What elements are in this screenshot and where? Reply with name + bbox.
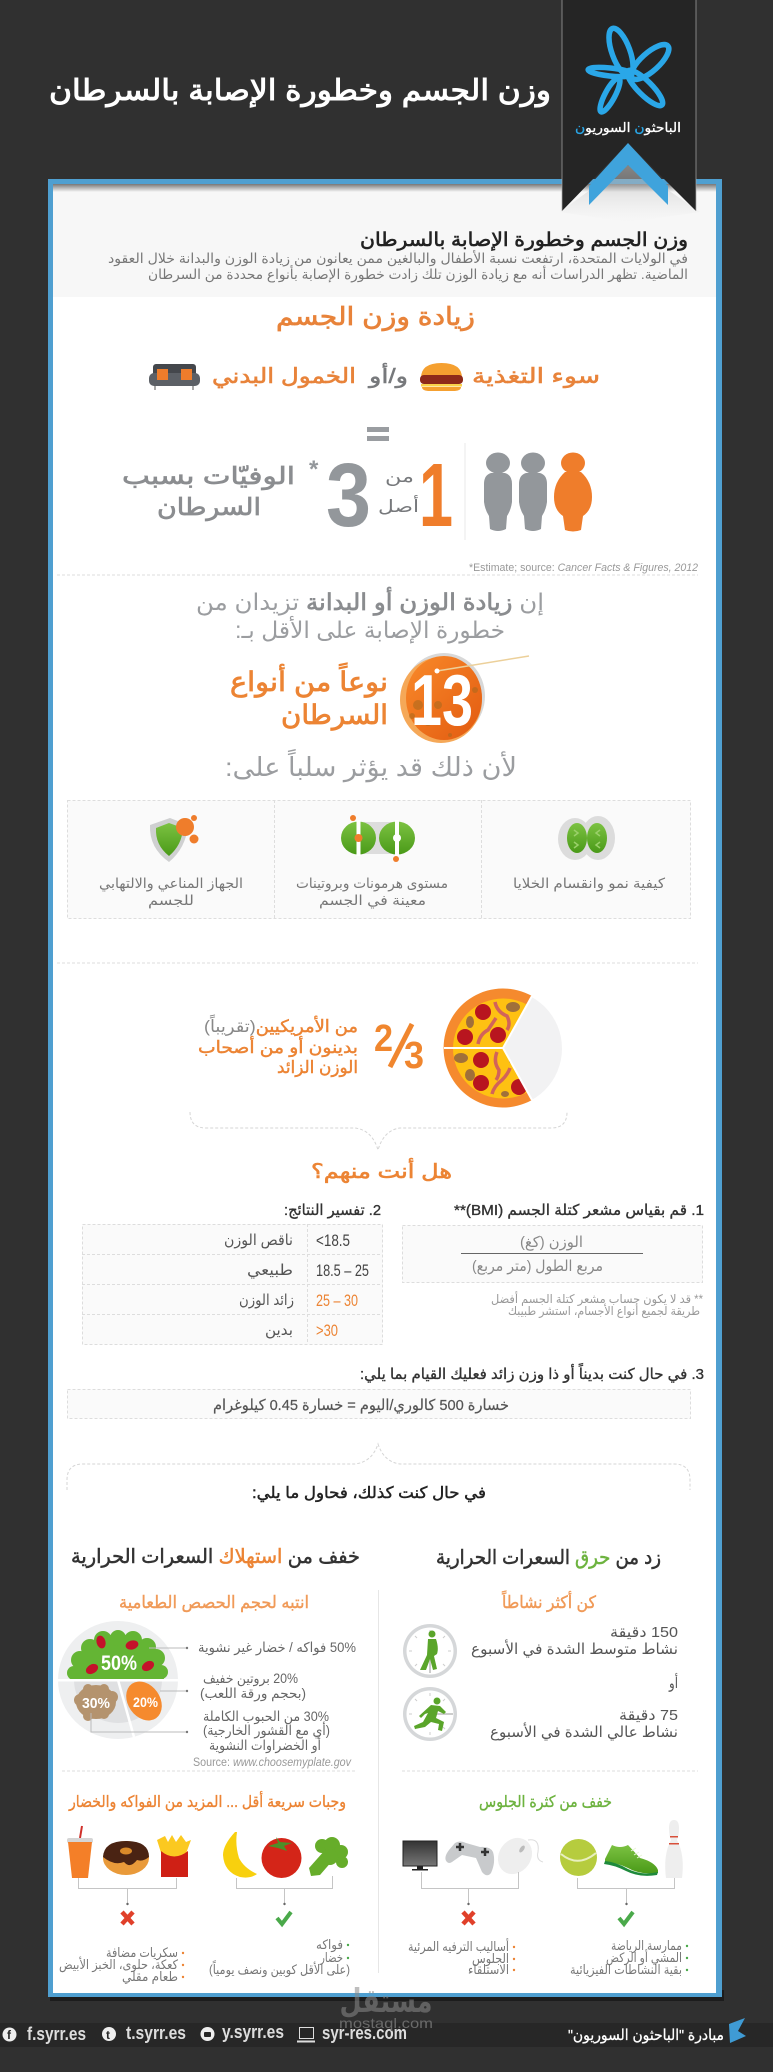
plate text: 30% من الحبوب الكاملة — [203, 1709, 329, 1725]
equals sign — [367, 427, 389, 441]
risk statement — [196, 587, 544, 644]
BMI results table: <18.5 — [316, 1231, 350, 1250]
list: healthy — [209, 1937, 350, 1978]
icon: couch — [149, 364, 200, 390]
icon: footer logo flag — [729, 2018, 746, 2043]
BMI results table: طبيعي — [247, 1262, 293, 1280]
heading: are you one of them: هل أنت منهم؟ — [311, 1158, 452, 1183]
logo name: الباحثون السوريون — [575, 120, 681, 136]
number 3: 3 — [326, 446, 371, 546]
cell: immune system — [99, 815, 243, 909]
intro block — [108, 230, 688, 283]
icon: bowling pin — [665, 1820, 683, 1878]
estimate source: *Estimate; source: Cancer Facts & Figures, 2012 — [469, 562, 698, 574]
footer band — [0, 2018, 773, 2047]
two thirds fraction — [374, 1018, 424, 1077]
step 1 heading: 1. قم بقياس مشعر كتلة الجسم (BMI)** — [454, 1202, 704, 1219]
text: poor nutrition: سوء التغذية — [472, 365, 600, 388]
cell: cell division: كيفية نمو وانقسام الخلايا — [513, 875, 665, 892]
13 cancer types: السرطان — [281, 700, 388, 731]
text: if so, try: في حال كنت كذلك، فحاول ما يلي: — [252, 1485, 486, 1503]
plate text: 50% فواكه / خضار غير نشوية — [198, 1640, 356, 1656]
icon: twitter: t — [106, 2028, 110, 2042]
icon: dividing cell — [558, 816, 615, 860]
icon: plate chart: 20% — [133, 1694, 158, 1710]
list: junk — [59, 1945, 184, 1984]
plate text: (أي مع القشور الخارجية) — [203, 1721, 330, 1739]
text: 13 types: نوعاً من أنواع — [230, 662, 388, 698]
step 3 heading: 3. في حال كنت بديناً أو ذا وزن زائد فعليك القيام بما يلي: — [360, 1363, 704, 1384]
dashed brace up — [67, 1444, 690, 1490]
icon: cross junk — [122, 1912, 133, 1924]
asterisk: * — [309, 456, 319, 483]
icon: fries — [157, 1835, 191, 1877]
subheading: portions: انتبه لحجم الحصص الطعامية — [119, 1593, 309, 1613]
activity text: أو — [668, 1673, 678, 1692]
link: twitter: t.syrr.es — [126, 2023, 186, 2043]
text: two thirds of Americans: من الأمريكيين(تقريباً) — [204, 1013, 358, 1036]
plate connectors — [91, 1648, 187, 1732]
icon: mouse — [491, 1831, 543, 1881]
BMI results table: ناقص الوزن — [224, 1232, 293, 1249]
1 in 3 statistic: أصل — [378, 495, 419, 516]
icon: clock walking — [403, 1624, 457, 1678]
salad — [67, 1630, 168, 1679]
BMI results table: 18.5 – 25 — [316, 1261, 369, 1280]
list: active: ممارسة الرياضة — [611, 1938, 682, 1954]
intro paragraph: في الولايات المتحدة، ارتفعت نسبة الأطفال والبالغين ممن يعانون من زيادة الوزن والبدانة خلال العقود — [108, 250, 688, 267]
plate text: أو الخضراوات النشوية — [209, 1736, 321, 1754]
bread — [74, 1684, 118, 1721]
link: youtube: y.syrr.es — [222, 2022, 284, 2042]
text: physical inactivity: الخمول البدني — [212, 365, 356, 388]
cell: immune system: للجسم — [148, 892, 194, 909]
link: website: syr-res.com — [322, 2023, 407, 2043]
calorie box: خسارة 500 كالوري/اليوم = خسارة 0.45 كيلوغرام — [213, 1397, 509, 1415]
icon: shield — [150, 815, 198, 862]
text: out of: من — [385, 467, 414, 486]
BMI note — [491, 1291, 703, 1319]
BMI results table: بدين — [265, 1322, 293, 1339]
icon: check healthy — [277, 1912, 291, 1924]
risk statement: إن زيادة الوزن أو البدانة تزيدان من — [196, 587, 544, 616]
list: junk: كعكة، حلوى، الخبز الأبيض — [59, 1956, 179, 1973]
watermark: mostaql.com — [339, 2015, 433, 2031]
plate text: (بحجم ورقة اللعب) — [200, 1686, 306, 1702]
icon: game controller — [445, 1842, 494, 1875]
list: junk: سكريات مضافة — [106, 1945, 178, 1961]
calorie box — [68, 1390, 690, 1418]
icon: facebook: f — [7, 2028, 12, 2042]
activity text: نشاط عالي الشدة في الأسبوع — [490, 1722, 678, 1742]
cell: hormones — [296, 815, 448, 909]
logo ribbon — [562, 0, 696, 211]
icon: plate chart — [58, 1621, 188, 1739]
activity text: 75 دقيقة — [619, 1707, 678, 1724]
icons: healthy foods — [223, 1832, 348, 1878]
icon: monitor — [403, 1841, 437, 1870]
icons: junk foods — [67, 1826, 191, 1878]
main title: وزن الجسم وخطورة الإصابة بالسرطان — [49, 75, 551, 108]
icon: cell 13 — [400, 653, 529, 743]
BMI results table: زائد الوزن — [239, 1292, 294, 1309]
icons: sedentary items — [403, 1831, 543, 1881]
intro paragraph: الماضية. تظهر الدراسات أنه مع زيادة الوزن تلك زادت خطورة الإصابة بأنواع محددة من السرطان — [148, 265, 688, 283]
two thirds fraction: 3 — [404, 1035, 424, 1077]
icon: tomato — [262, 1837, 302, 1878]
subheading: be active: كن أكثر نشاطاً — [501, 1589, 597, 1612]
text: and/or: و/أو — [368, 363, 408, 388]
step 2 heading: 2. تفسير النتائج: — [284, 1202, 381, 1219]
icon: cross sedentary — [463, 1912, 474, 1924]
subheading: less sitting: خفف من كثرة الجلوس — [479, 1794, 612, 1812]
list: active: بقية النشاطات الفيزيائية — [570, 1962, 682, 1978]
icon: tennis ball — [560, 1839, 597, 1876]
icon: facebook — [2, 2028, 16, 2042]
affected systems table — [68, 800, 690, 918]
list: healthy: فواكه — [316, 1937, 343, 1953]
BMI results table: >30 — [316, 1321, 338, 1340]
link: facebook: f.syrr.es — [27, 2024, 86, 2044]
icon: donut — [103, 1841, 149, 1875]
text: two thirds of Americans — [198, 1013, 358, 1077]
intro paragraph — [108, 250, 688, 283]
13 cancer types — [230, 653, 529, 743]
cell: immune system: الجهاز المناعي والالتهابي — [99, 875, 243, 892]
list: sedentary: الجلوس — [472, 1951, 509, 1967]
plate text: 20% بروتين خفيف — [203, 1671, 298, 1687]
causes row — [149, 363, 600, 391]
list: active: المشي أو الركض — [606, 1949, 682, 1966]
icon: cell 13: 13 — [411, 661, 473, 741]
subheading: less fast food: وجبات سريعة أقل ... المزيد من الفواكه والخضار — [68, 1791, 346, 1812]
initiative text: مبادرة "الباحثون السوريون" — [568, 2027, 724, 2044]
watermark — [339, 1982, 433, 2031]
activity text: 150 دقيقة — [610, 1624, 678, 1641]
activity text: نشاط متوسط الشدة في الأسبوع — [471, 1639, 678, 1659]
risk statement: خطورة الإصابة على الأقل بـ: — [235, 616, 505, 644]
BMI formula box — [402, 1226, 702, 1282]
icon: check active — [619, 1912, 633, 1924]
icons: active items — [560, 1820, 683, 1878]
intro heading: وزن الجسم وخطورة الإصابة بالسرطان — [360, 230, 688, 251]
decision brackets — [78, 1872, 674, 1903]
column heading: reduce intake: خفف من استهلاك السعرات الحرارية — [71, 1546, 360, 1568]
list: junk: طعام مقلي — [122, 1969, 178, 1984]
icon: shoe — [604, 1845, 658, 1876]
chevron — [589, 143, 668, 205]
cell: hormones: مستوى هرمونات وبروتينات — [296, 875, 448, 892]
dashed brace down — [190, 1112, 567, 1150]
BMI note: طريقة لجميع أنواع الأجسام، استشر طبيبك — [508, 1303, 700, 1319]
icon: plate chart: 30% — [82, 1695, 110, 1712]
cell: cell division — [513, 816, 665, 892]
chicken — [119, 1675, 169, 1727]
ribbon shadow — [560, 165, 700, 222]
list: healthy: خضار — [319, 1950, 343, 1966]
list: sedentary — [408, 1938, 515, 1977]
list: sedentary: الاستلقاء — [468, 1962, 509, 1977]
heading: weight gain: زيادة وزن الجسم — [276, 303, 475, 332]
cell: hormones: معينة في الجسم — [319, 892, 426, 909]
two thirds fraction: 2 — [374, 1018, 393, 1060]
BMI formula box: مربع الطول (متر مربع) — [472, 1258, 603, 1275]
watermark: مستقل — [340, 1982, 432, 2019]
text: cancer deaths: الوفيّات بسبب — [122, 463, 295, 490]
icon: twitter — [102, 2027, 116, 2042]
plate source: Source: www.choosemyplate.gov — [193, 1755, 352, 1769]
icon: computer — [297, 2028, 315, 2042]
icon: person orange — [554, 452, 592, 532]
list: sedentary: أساليب الترفيه المرئية — [408, 1938, 509, 1955]
BMI results table: 25 – 30 — [316, 1291, 358, 1310]
main white panel — [48, 179, 724, 2001]
icon: drink cup — [67, 1826, 93, 1878]
BMI note: ** قد لا يكون حساب مشعر كتلة الجسم أفضل — [491, 1291, 703, 1307]
plate text — [198, 1640, 356, 1754]
icon: burger — [420, 363, 463, 391]
1 in 3 statistic: السرطان — [157, 494, 261, 521]
icon: person gray — [519, 452, 547, 531]
BMI formula box: الوزن (كغ) — [520, 1234, 583, 1251]
column heading: burn: زد من حرق السعرات الحرارية — [436, 1547, 661, 1569]
icon: pizza two thirds — [444, 988, 562, 1108]
1 in 3 statistic — [122, 443, 592, 546]
icon: broccoli — [309, 1837, 348, 1876]
list: active — [570, 1938, 688, 1978]
number 1: 1 — [419, 446, 453, 546]
activity text — [471, 1624, 678, 1742]
icon: clock running — [403, 1687, 457, 1741]
subheading: negatively affect: لأن ذلك قد يؤثر سلباً على: — [225, 748, 517, 783]
BMI results table — [82, 1224, 382, 1344]
icon: plate chart: 50% — [101, 1652, 137, 1675]
icon: hormone discs — [341, 815, 415, 862]
icon: youtube — [200, 2027, 214, 2041]
icon: person gray — [484, 452, 512, 531]
list: healthy: (على الأقل كوبين ونصف يومياً) — [209, 1960, 350, 1978]
logo flower — [588, 25, 674, 114]
text: two thirds of Americans: الوزن الزائد — [277, 1058, 358, 1077]
icon: banana — [223, 1832, 257, 1878]
text: two thirds of Americans: بدينون أو من أصحاب — [198, 1036, 358, 1057]
